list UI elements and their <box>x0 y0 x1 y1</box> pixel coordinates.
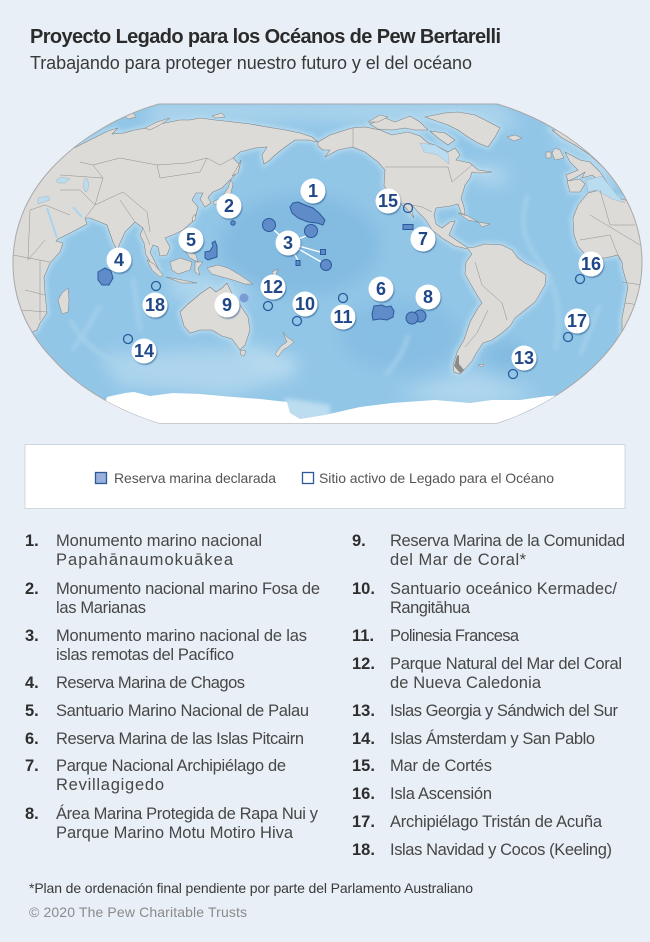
inland water <box>38 143 625 204</box>
badge 15: 15 <box>378 191 398 211</box>
item 12 <box>352 655 622 692</box>
site 4 <box>98 268 113 285</box>
item 11: 11. <box>352 627 374 645</box>
badge 14 <box>132 338 156 364</box>
land masses <box>0 112 650 374</box>
item 17: 17. <box>352 813 375 831</box>
site 9 <box>240 294 248 302</box>
site 15 <box>404 204 412 212</box>
badge 3 <box>276 230 300 256</box>
item 14: 14. <box>352 730 375 748</box>
item 10: 10. <box>352 580 375 598</box>
item 16: 16. <box>352 785 375 803</box>
item 12: de Nueva Caledonia <box>390 674 542 692</box>
item 2 <box>25 580 320 617</box>
item 17: Archipiélago Tristán de Acuña <box>390 813 603 831</box>
legend <box>25 444 625 508</box>
number badges <box>106 178 604 370</box>
islands <box>58 113 564 367</box>
item 16: Isla Ascensión <box>390 785 492 803</box>
badge 8 <box>416 284 440 310</box>
badge 18 <box>142 292 168 318</box>
site 7 <box>403 224 413 230</box>
item 14: Islas Ámsterdam y San Pablo <box>390 729 595 748</box>
site list: left column <box>25 532 320 842</box>
site list: right column <box>352 532 625 859</box>
connector lines: site 3 <box>274 230 323 263</box>
site 13 <box>508 370 518 378</box>
badge 17: 17 <box>567 311 587 331</box>
item 3: Monumento marino nacional de las <box>56 627 307 645</box>
item 7: Parque Nacional Archipiélago de <box>56 757 286 775</box>
item 3 <box>25 627 307 664</box>
badge 8: 8 <box>423 287 433 307</box>
item 8 <box>25 804 319 842</box>
item 11: Polinesia Francesa <box>390 627 520 645</box>
footnote: *Plan de ordenación final pendiente por parte del Parlamento Australiano <box>29 880 473 896</box>
badge 16: 16 <box>581 254 601 274</box>
legend item: active site: Sitio activo de Legado para el Océano <box>319 470 554 486</box>
legend item: declared reserve: Reserva marina declarada <box>114 470 276 486</box>
item 4: 4. <box>25 674 39 692</box>
badge 9: 9 <box>222 295 232 315</box>
badge 9 <box>214 292 240 318</box>
site 8 <box>406 310 426 324</box>
badge 13 <box>512 346 536 370</box>
badge 11 <box>330 304 356 330</box>
site 1 <box>290 202 325 225</box>
item 7: 7. <box>25 757 39 775</box>
badge 10: 10 <box>295 294 315 314</box>
item 8: Área Marina Protegida de Rapa Nui y <box>56 804 319 823</box>
item 15: Mar de Cortés <box>390 757 492 775</box>
item 13: Islas Georgia y Sándwich del Sur <box>390 702 618 720</box>
site 10 <box>292 316 302 326</box>
item 10 <box>352 580 617 617</box>
item 8: Parque Marino Motu Motiro Hiva <box>56 824 294 842</box>
item 2: Monumento nacional marino Fosa de <box>56 580 320 598</box>
item 6: 6. <box>25 730 39 748</box>
item 12: 12. <box>352 655 375 673</box>
item 3: islas remotas del Pacífico <box>56 646 234 664</box>
pale shelf near ice <box>285 398 330 423</box>
badge 4: 4 <box>114 250 124 270</box>
badge 3: 3 <box>283 233 293 253</box>
dark coast detail <box>454 355 464 373</box>
badge 13: 13 <box>514 348 534 368</box>
item 10: Santuario oceánico Kermadec/ <box>390 580 617 598</box>
badge 11: 11 <box>333 307 353 327</box>
item 3: 3. <box>25 627 39 645</box>
badge 18: 18 <box>145 295 165 315</box>
badge 5 <box>178 228 204 252</box>
item 5: 5. <box>25 702 39 720</box>
badge 1: 1 <box>308 181 318 201</box>
site 16 <box>576 274 584 284</box>
copyright: © 2020 The Pew Charitable Trusts <box>29 904 247 920</box>
badge 16 <box>578 252 604 276</box>
title: Proyecto Legado para los Océanos de Pew Bertarelli <box>30 26 501 48</box>
badge 14: 14 <box>134 341 154 361</box>
item 13: 13. <box>352 702 375 720</box>
item 15: 15. <box>352 757 375 775</box>
site 11 <box>338 294 348 302</box>
badge 1 <box>300 178 326 204</box>
site 17 <box>564 332 572 342</box>
item 18: 18. <box>352 841 375 859</box>
site 3 <box>262 218 332 270</box>
badge 12: 12 <box>263 277 283 297</box>
badge 2 <box>216 194 242 218</box>
map frame line <box>13 104 642 423</box>
item 1 <box>25 532 262 569</box>
item 7: Revillagigedo <box>56 776 164 794</box>
site 12 <box>264 302 272 310</box>
site 18 <box>152 282 160 290</box>
badge 6: 6 <box>376 279 386 299</box>
item 10: Rangitāhua <box>390 599 471 617</box>
item 5: Santuario Marino Nacional de Palau <box>56 702 309 720</box>
item 6: Reserva Marina de las Islas Pitcairn <box>56 730 304 748</box>
site 5 <box>205 241 217 260</box>
item 9: Reserva Marina de la Comunidad <box>390 532 625 550</box>
item 18: Islas Navidad y Cocos (Keeling) <box>390 841 612 859</box>
site 6 <box>372 305 394 320</box>
subtitle: Trabajando para proteger nuestro futuro y el del océano <box>30 53 472 73</box>
badge 5: 5 <box>186 230 196 250</box>
item 12: Parque Natural del Mar del Coral <box>390 655 622 673</box>
item 2: las Marianas <box>56 599 146 617</box>
item 9: del Mar de Coral* <box>390 551 527 569</box>
badge 6 <box>368 276 394 302</box>
item 8: 8. <box>25 805 39 823</box>
site 2 <box>231 221 235 225</box>
item 9: 9. <box>352 532 366 550</box>
badge 10 <box>292 292 318 316</box>
item 4: Reserva Marina de Chagos <box>56 674 245 692</box>
item 2: 2. <box>25 580 39 598</box>
badge 17 <box>564 308 590 334</box>
item 1: 1. <box>25 532 39 550</box>
world map <box>0 100 650 430</box>
item 1: Monumento marino nacional <box>56 532 262 550</box>
badge 7 <box>410 226 436 252</box>
ocean <box>32 104 628 419</box>
badge 15 <box>376 188 400 214</box>
antarctica <box>100 392 570 423</box>
item 9 <box>352 532 625 569</box>
site 14 <box>124 334 132 344</box>
item 1: Papahānaumokuākea <box>56 551 234 569</box>
item 7 <box>25 757 286 794</box>
legend box <box>25 444 625 508</box>
badge 4 <box>106 248 132 272</box>
country borders <box>13 128 642 347</box>
badge 7: 7 <box>418 229 428 249</box>
badge 12 <box>260 274 286 300</box>
badge 2: 2 <box>224 196 234 216</box>
